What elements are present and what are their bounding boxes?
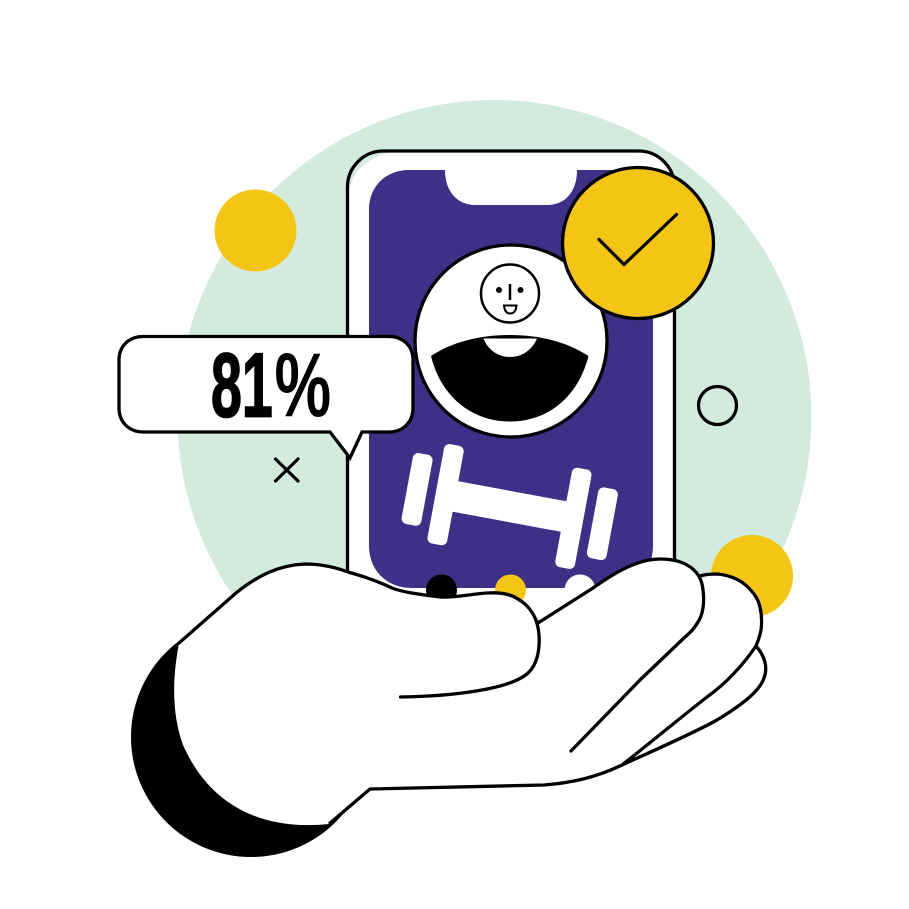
- badge circle: [562, 168, 714, 318]
- phone outline: [348, 151, 674, 622]
- phone body: [348, 151, 674, 622]
- avatar body: [431, 335, 588, 422]
- wrist and palm edge: [329, 765, 622, 824]
- yellow dot top left: [214, 190, 296, 272]
- background circle: [178, 100, 812, 734]
- percentage: 81: [211, 334, 273, 436]
- middle finger outline: [622, 574, 762, 765]
- avatar circle: [415, 245, 607, 437]
- x decoration: [276, 459, 298, 481]
- dumbbell: [398, 438, 621, 575]
- avatar neck: [484, 338, 537, 357]
- ring decoration: [698, 386, 736, 424]
- ring finger: [622, 646, 766, 765]
- hand: [131, 559, 766, 857]
- hand fill: [174, 559, 761, 825]
- percentage: %: [274, 334, 331, 436]
- check badge: [562, 168, 714, 318]
- bubble shape: [119, 336, 413, 458]
- check mark: [599, 214, 676, 264]
- phone: [348, 151, 674, 622]
- sleeve: [131, 617, 371, 857]
- profile avatar: [415, 245, 607, 437]
- percentage: [211, 334, 331, 436]
- yellow dot right: [711, 535, 793, 617]
- speech bubble: [119, 334, 413, 458]
- small face: [481, 264, 539, 322]
- green corner gap: [348, 152, 392, 194]
- page dots: [426, 574, 596, 606]
- phone screen: [369, 170, 653, 588]
- index finger outline: [538, 559, 704, 751]
- hand top and thumb outline: [179, 564, 539, 697]
